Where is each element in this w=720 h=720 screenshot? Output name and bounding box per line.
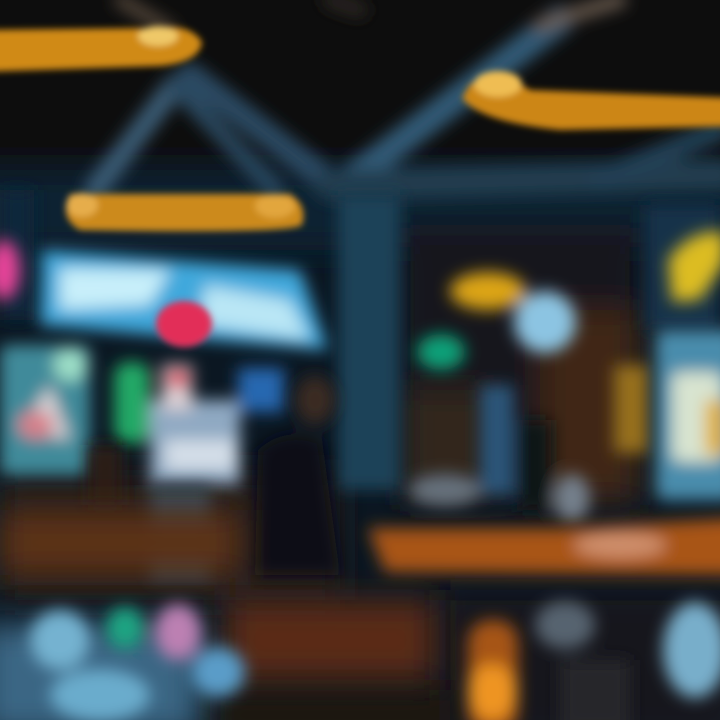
people silhouettes: left — [88, 376, 340, 580]
ceiling beams — [95, 0, 720, 190]
light: yellow oval — [450, 272, 526, 310]
red light on screen — [156, 301, 212, 347]
lamp: top right — [462, 77, 720, 130]
light: green sign — [417, 334, 465, 370]
pink sign: far left — [0, 240, 20, 300]
sign: yellow top right — [668, 232, 720, 302]
bottom centre orange glow — [468, 620, 518, 720]
right side lights and discs — [417, 232, 720, 453]
lamp: top left — [0, 27, 202, 72]
large screen: left — [40, 250, 328, 350]
light: pale blue globe — [514, 291, 576, 353]
right screen — [656, 330, 720, 500]
wooden tables — [0, 510, 435, 680]
lamp: centre left — [66, 194, 304, 231]
pillars — [0, 190, 720, 490]
bottom left blurred foreground lights — [0, 625, 200, 720]
lower left displays — [0, 345, 284, 485]
people: right centre — [409, 385, 590, 522]
ceiling lamps — [0, 26, 720, 231]
bottom right foreground lights — [535, 601, 720, 720]
